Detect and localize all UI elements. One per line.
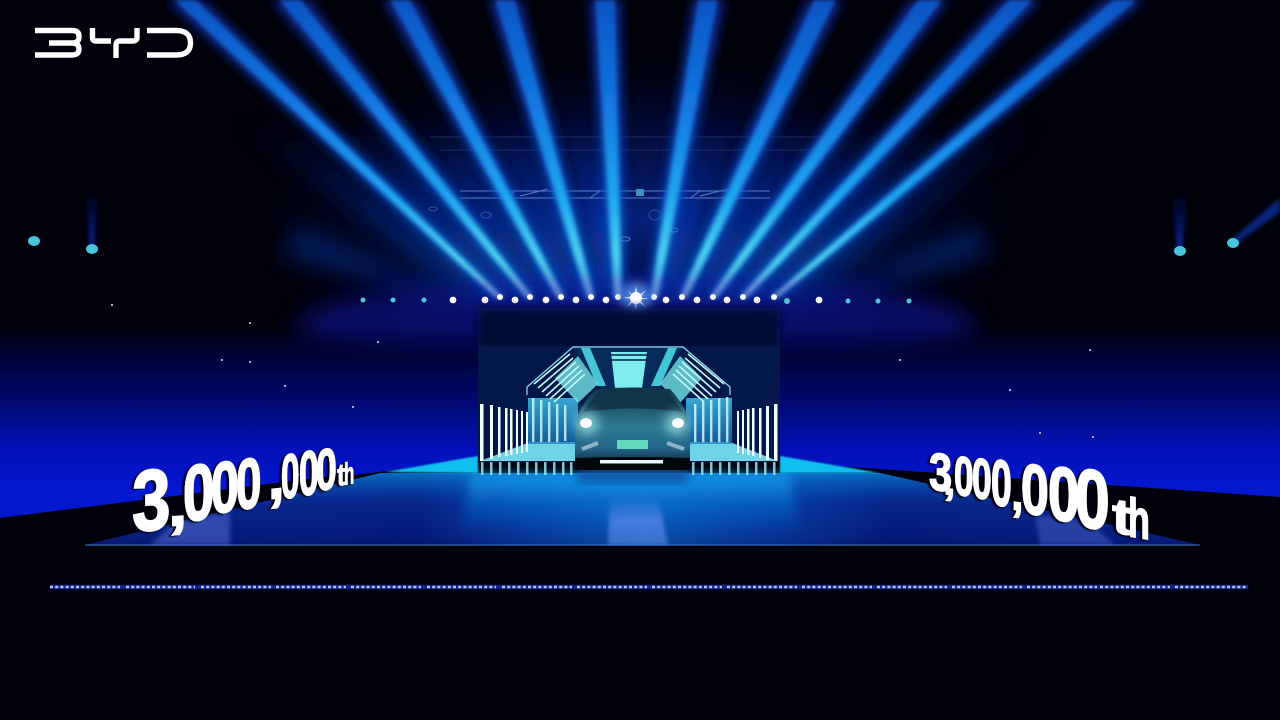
left 3,000,000th number: 0 [211,446,239,530]
tunnel outer arch [527,347,730,395]
right 3,000,000th number: 0 [1048,450,1079,540]
horizon glow left [385,456,478,473]
LED strip glow [50,585,1248,589]
tyres and lower bumper [575,457,690,470]
cyan fixtures [360,298,912,304]
right 3,000,000th number: 0 [1075,450,1110,549]
screen glow on floor [460,473,800,535]
ceiling panels sides [581,348,677,386]
wall stars [111,304,1094,438]
left 3,000,000th number: 0 [281,440,300,513]
logo letter Y [92,28,137,58]
windshield [583,390,683,412]
screen bar reflections [481,462,776,475]
left 3,000,000th number: 0 [183,446,214,539]
fixture row [360,282,912,314]
car reflection [608,495,668,545]
white fixtures [450,294,822,303]
left 3,000,000th number: 0 [236,442,261,525]
right rib stripes [660,354,724,403]
central star light [620,282,652,314]
right 3,000,000th number [929,442,1150,551]
right 3,000,000th number: , [943,458,956,505]
beam halos [165,0,1146,298]
left 3,000,000th number: 3 [132,449,171,550]
side spotlights [28,190,1280,256]
ceiling stripes [609,355,649,360]
moving-head light beams [165,0,1146,298]
stage floor [85,456,1200,545]
right 3,000,000th number: 3 [929,442,952,504]
left 3,000,000th number: 0 [299,437,319,509]
left 3,000,000th number: , [268,442,285,512]
car body [575,388,690,466]
overhead blue glow [246,50,1026,390]
floor light patch left [150,512,230,545]
side bars right [737,404,778,461]
left 3,000,000th number: h [344,456,354,492]
lighting truss [429,137,840,241]
right 3,000,000th number: h [1128,487,1150,551]
right 3,000,000th number: 0 [972,447,992,513]
tunnel floor [480,442,778,461]
left 3,000,000th number: t [337,456,346,493]
BYD logo [35,28,190,58]
beam cores [174,0,1137,298]
LED strip [50,586,1248,588]
side deck left [0,473,355,546]
ceiling panel centre [611,352,647,388]
logo letter B [35,30,79,55]
headlight glows [575,411,689,435]
stage edge [85,544,1200,546]
licence plate [617,440,648,449]
stage front [0,546,1280,720]
logo letter D [147,30,190,55]
car [575,388,690,470]
left 3,000,000th number: 0 [316,436,337,504]
side bars left [480,404,528,461]
inner vertical lights [532,397,728,442]
floor light patch right [1035,515,1115,545]
horizon glow right [780,456,880,473]
ceiling dark fill [573,348,683,388]
car shadow on floor [578,470,688,482]
right 3,000,000th number: 0 [991,447,1012,522]
right 3,000,000th number: , [1011,465,1024,522]
left 3,000,000th number [132,436,354,550]
tunnel side columns left [528,398,578,444]
screen background [478,346,780,462]
LED screen with tunnel [478,346,780,462]
wide faint beam fans [175,80,1105,302]
right 3,000,000th number: t [1112,487,1132,546]
left rib stripes [534,354,598,403]
tunnel side columns right [686,398,732,444]
left LED wall [0,325,478,518]
central lower glow [296,275,976,375]
right 3,000,000th number: 0 [1021,449,1049,533]
lower grille light [600,460,663,464]
fog lamp strips [582,443,684,449]
left 3,000,000th number: , [168,470,187,539]
right 3,000,000th number: 0 [954,444,974,509]
side deck right [875,471,1280,546]
right LED wall [780,325,1280,497]
stage front header [478,308,780,354]
